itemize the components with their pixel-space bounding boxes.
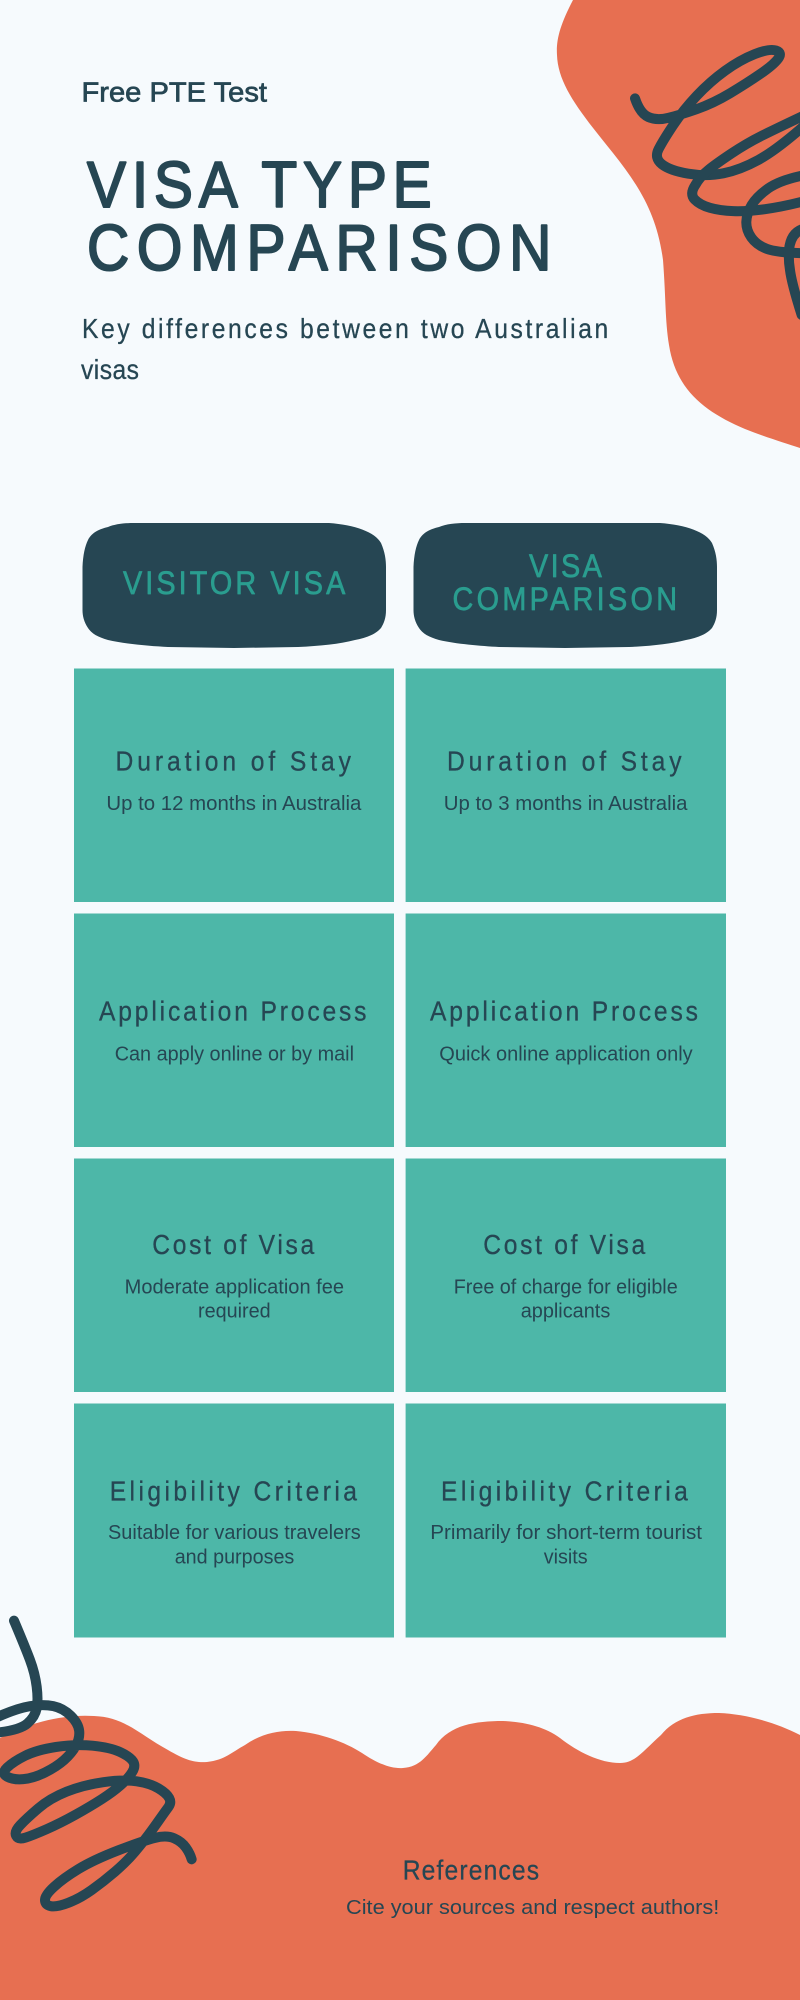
decoration: top-right scribble bbox=[635, 50, 800, 315]
column header: visa comparison bbox=[414, 523, 717, 648]
panel: comparison duration of stay: Duration of Stay bbox=[447, 745, 682, 777]
panel: comparison eligibility: Primarily for short-term tourist bbox=[430, 1522, 702, 1544]
column header: visitor visa bbox=[82, 523, 386, 648]
references heading: References bbox=[403, 1854, 539, 1886]
decoration: bottom-left scribble bbox=[0, 1621, 192, 1906]
panel: comparison cost: Free of charge for eligible bbox=[454, 1276, 678, 1298]
references note: Cite your sources and respect authors! bbox=[346, 1897, 719, 1919]
column header: visitor visa: VISITOR VISA bbox=[123, 566, 346, 601]
title: VISA TYPE bbox=[87, 149, 432, 222]
panel: visitor visa application process: Application Process bbox=[99, 995, 367, 1027]
panel: visitor visa eligibility: Eligibility Criteria bbox=[110, 1475, 357, 1507]
subtitle: visas bbox=[81, 354, 139, 385]
organisation name: Free PTE Test bbox=[82, 77, 267, 108]
panel: visitor visa application process bbox=[74, 914, 394, 1147]
panel: comparison eligibility bbox=[406, 1404, 726, 1638]
panel: comparison eligibility: Eligibility Criteria bbox=[441, 1475, 688, 1507]
panel: comparison application process bbox=[406, 914, 726, 1147]
panel: visitor visa eligibility: Suitable for various travelers bbox=[108, 1522, 361, 1544]
panel: visitor visa duration of stay: Duration of Stay bbox=[116, 745, 352, 777]
panel: comparison eligibility: visits bbox=[544, 1546, 588, 1568]
column header: visa comparison: COMPARISON bbox=[452, 582, 677, 617]
subtitle bbox=[81, 313, 608, 385]
panel: visitor visa cost bbox=[74, 1158, 394, 1392]
panel: comparison cost bbox=[406, 1158, 726, 1392]
panel: comparison duration of stay: Up to 3 months in Australia bbox=[444, 793, 688, 815]
decoration: bottom orange wave bbox=[0, 1713, 800, 2000]
panel: comparison application process: Application Process bbox=[430, 995, 698, 1027]
panel: comparison cost: applicants bbox=[521, 1300, 610, 1322]
column header: visa comparison: VISA bbox=[529, 549, 603, 584]
title: COMPARISON bbox=[87, 212, 551, 285]
panel: visitor visa application process: Can apply online or by mail bbox=[115, 1044, 354, 1066]
panel: visitor visa cost: Moderate application fee bbox=[125, 1276, 344, 1298]
panel: visitor visa duration of stay: Up to 12 months in Australia bbox=[106, 793, 362, 815]
panel: comparison application process: Quick online application only bbox=[439, 1044, 693, 1066]
panel: visitor visa eligibility: and purposes bbox=[175, 1546, 294, 1568]
decoration: top-right orange blob bbox=[557, 0, 800, 448]
panel: visitor visa eligibility bbox=[74, 1404, 394, 1638]
panel: visitor visa duration of stay bbox=[74, 668, 394, 902]
panel: comparison cost: Cost of Visa bbox=[483, 1229, 646, 1260]
title bbox=[87, 149, 551, 285]
panel: visitor visa cost: Cost of Visa bbox=[152, 1229, 315, 1260]
subtitle: Key differences between two Australian bbox=[82, 313, 608, 344]
panel: comparison duration of stay bbox=[406, 668, 726, 902]
panel: visitor visa cost: required bbox=[198, 1300, 271, 1322]
